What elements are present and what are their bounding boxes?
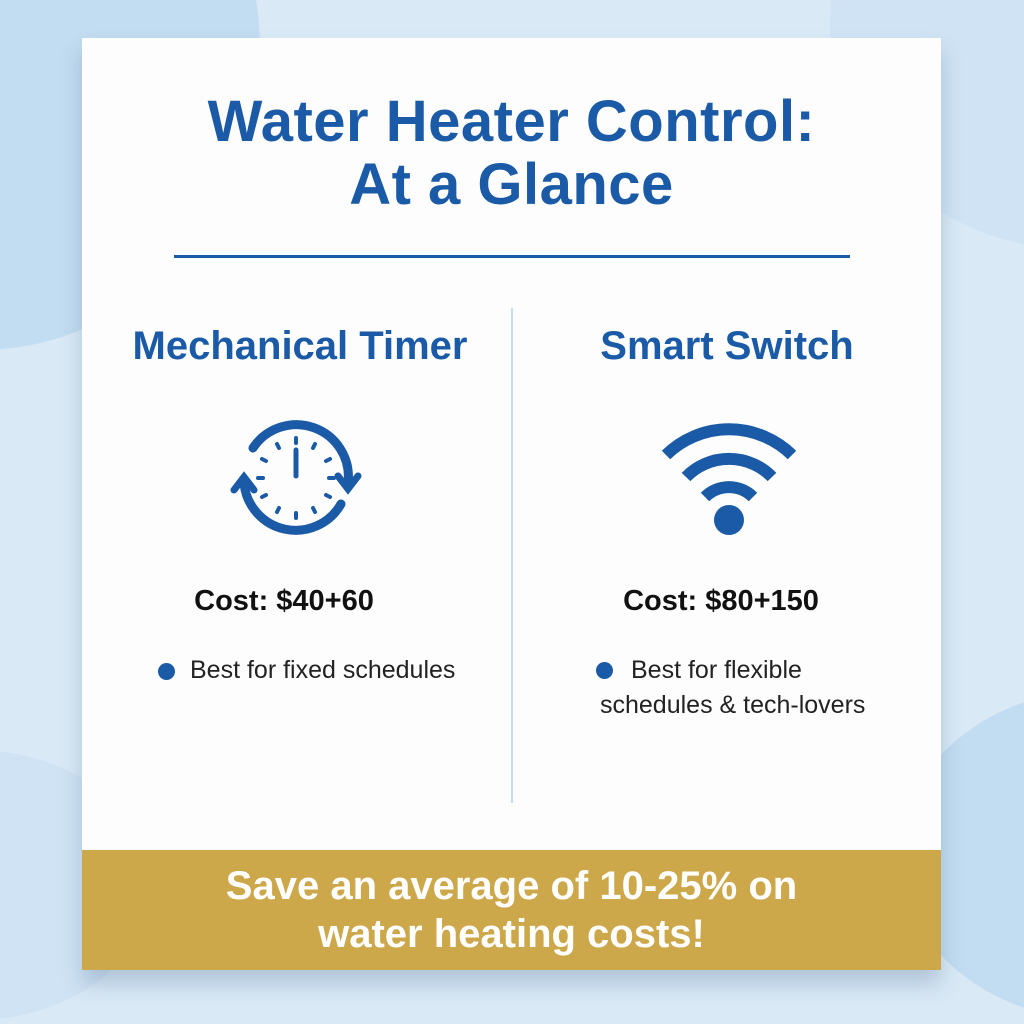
bullet: mechanical: Best for fixed schedules xyxy=(190,656,455,684)
title: Water Heater Control: xyxy=(208,89,815,154)
banner: savings: water heating costs! xyxy=(318,912,705,956)
bullet: smart: schedules & tech-lovers xyxy=(600,691,865,719)
cost: mechanical: Cost: $40+60 xyxy=(194,585,374,617)
heading: mechanical timer: Mechanical Timer xyxy=(133,324,467,368)
icon: clock timer xyxy=(230,420,362,535)
cost: smart: Cost: $80+150 xyxy=(623,585,819,617)
banner: savings: Save an average of 10-25% on xyxy=(226,864,797,908)
heading: smart switch: Smart Switch xyxy=(600,324,854,368)
title xyxy=(208,89,815,217)
bullet: smart xyxy=(596,656,865,719)
banner: savings xyxy=(82,850,941,970)
card xyxy=(82,38,941,970)
bullet: smart: Best for flexible xyxy=(631,656,802,684)
title: At a Glance xyxy=(349,152,674,217)
icon: wifi xyxy=(662,423,796,535)
